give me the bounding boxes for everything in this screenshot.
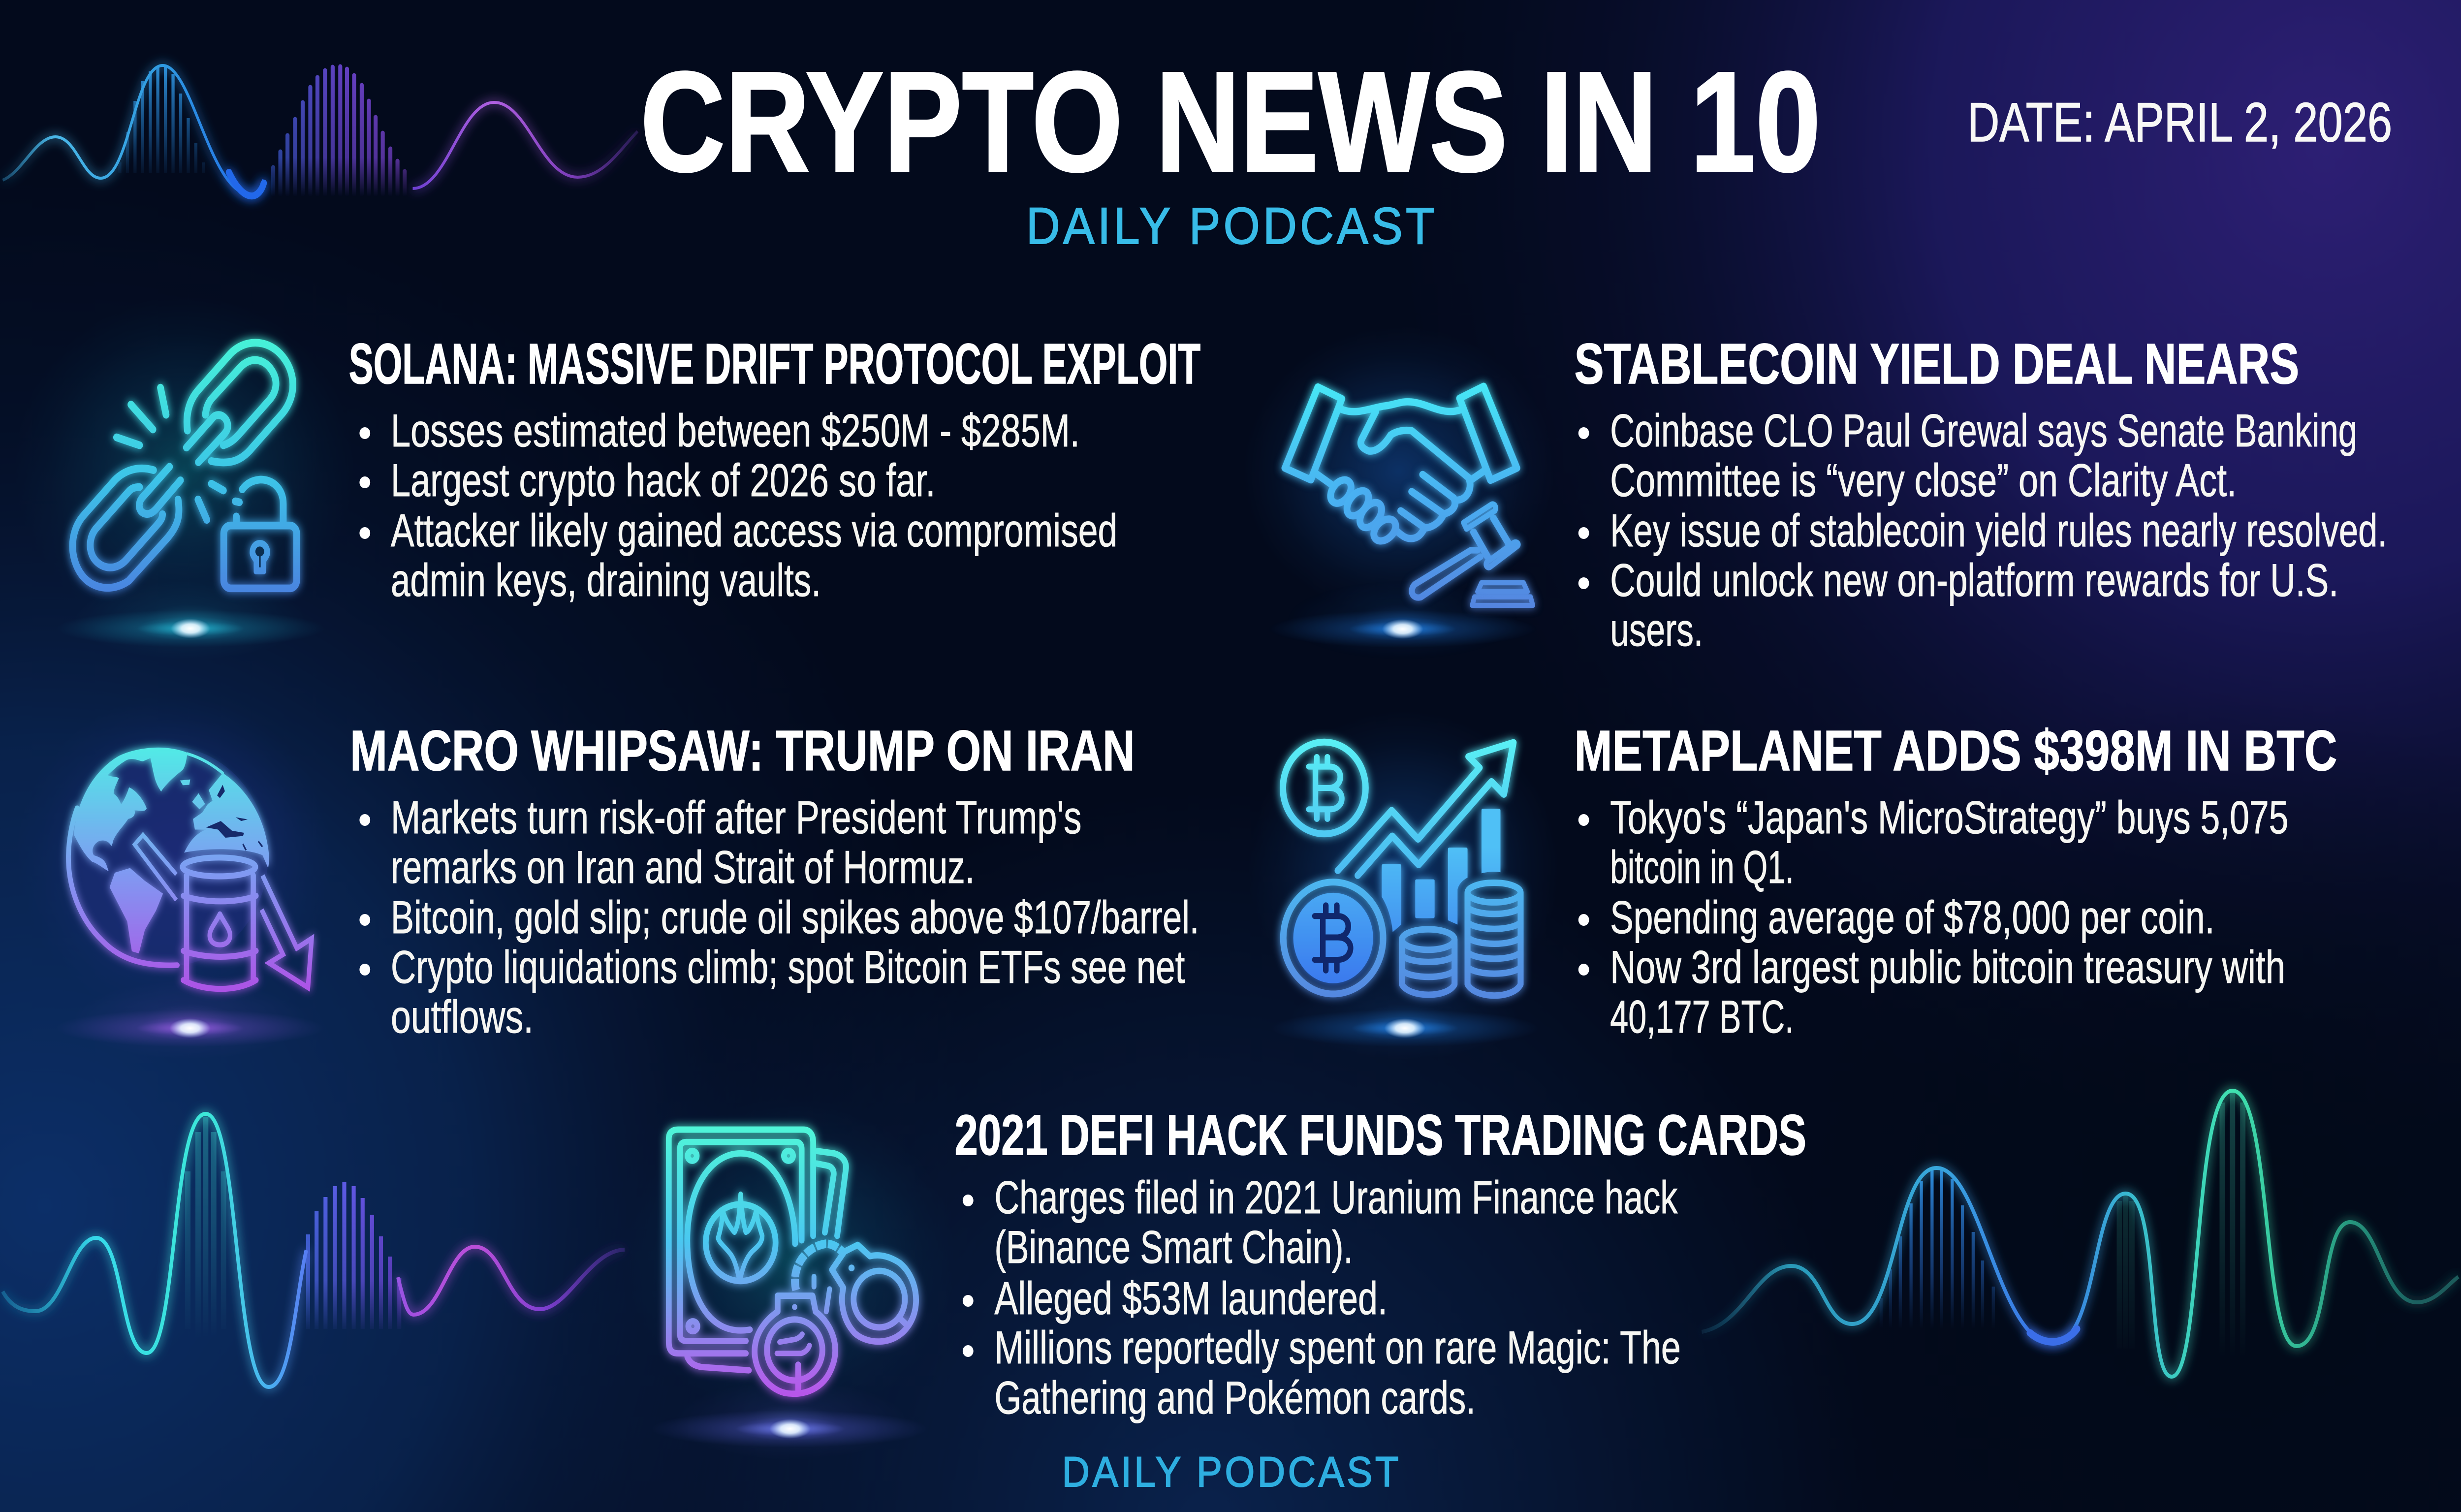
panel: DeFi hack trading cards	[627, 1098, 1806, 1460]
sound wave: top left	[2, 65, 637, 196]
title: CRYPTO NEWS IN 10	[640, 42, 1821, 201]
bullet list: bitcoin in Q1.	[1610, 842, 1794, 893]
bullet list	[1578, 405, 2387, 656]
panel: Solana exploit	[15, 296, 1200, 660]
panel: Metaplanet BTC	[1248, 710, 2337, 1059]
icon: globe, oil barrel and falling arrow	[17, 695, 332, 1020]
bullet list: Alleged $53M laundered.	[994, 1273, 1388, 1324]
sound wave: bottom right	[1702, 1091, 2459, 1377]
bullet list: Now 3rd largest public bitcoin treasury with	[1610, 942, 2285, 993]
flare	[1268, 581, 1537, 660]
bullet list: Crypto liquidations climb; spot Bitcoin ETFs see net	[391, 942, 1185, 993]
bullet list	[359, 792, 1199, 1043]
icon: broken chain and open padlock	[15, 296, 354, 640]
bullet list: Largest crypto hack of 2026 so far.	[391, 455, 935, 506]
footer: daily podcast: DAILY PODCAST	[1062, 1449, 1399, 1496]
bullet list: Bitcoin, gold slip; crude oil spikes above $107/barrel.	[391, 892, 1199, 944]
panel: stablecoin yield deal	[1243, 326, 2387, 660]
date: DATE: APRIL 2, 2026	[1967, 91, 2392, 153]
bullet list: Committee is “very close” on Clarity Act.	[1610, 455, 2237, 506]
sound wave: bottom left	[2, 1114, 625, 1387]
bullet list	[963, 1172, 1681, 1424]
flare	[1271, 980, 1539, 1059]
flare	[652, 1381, 929, 1460]
heading: STABLECOIN YIELD DEAL NEARS	[1575, 332, 2299, 396]
icon: bitcoin coins, stacks and rising arrow	[1248, 710, 1559, 1026]
subtitle: daily podcast: DAILY PODCAST	[1026, 197, 1434, 255]
bullet list: Attacker likely gained access via compromised	[391, 505, 1117, 557]
heading: METAPLANET ADDS $398M IN BTC	[1575, 719, 2337, 783]
bullet list: (Binance Smart Chain).	[994, 1222, 1353, 1273]
bullet list: Millions reportedly spent on rare Magic: The	[994, 1322, 1681, 1374]
bullet list: Markets turn risk-off after President Trump's	[391, 792, 1081, 844]
bullet list: remarks on Iran and Strait of Hormuz.	[391, 842, 975, 893]
bullet list: Tokyo's “Japan's MicroStrategy” buys 5,075	[1610, 792, 2288, 844]
bullet list: users.	[1610, 604, 1703, 656]
bullet list: Gathering and Pokémon cards.	[994, 1372, 1476, 1424]
flare	[56, 980, 324, 1059]
bullet list	[1578, 792, 2288, 1043]
heading: MACRO WHIPSAW: TRUMP ON IRAN	[350, 719, 1135, 783]
bullet list: Losses estimated between $250M - $285M.	[391, 405, 1080, 457]
bullet list: Charges filed in 2021 Uranium Finance hack	[994, 1172, 1678, 1224]
icon: trading cards and handcuffs	[627, 1098, 955, 1423]
flare	[56, 581, 325, 660]
bullet list: outflows.	[391, 991, 534, 1043]
bullet list: admin keys, draining vaults.	[391, 555, 821, 606]
panel: macro whipsaw	[17, 695, 1199, 1059]
bullet list: Spending average of $78,000 per coin.	[1610, 892, 2214, 944]
bullet list	[359, 405, 1117, 606]
heading: SOLANA: MASSIVE DRIFT PROTOCOL EXPLOIT	[349, 332, 1200, 396]
heading: 2021 DEFI HACK FUNDS TRADING CARDS	[954, 1103, 1806, 1167]
bullet list: Could unlock new on-platform rewards for U.S.	[1610, 555, 2338, 606]
icon: handshake and gavel	[1243, 326, 1554, 616]
bullet list: 40,177 BTC.	[1610, 991, 1794, 1043]
